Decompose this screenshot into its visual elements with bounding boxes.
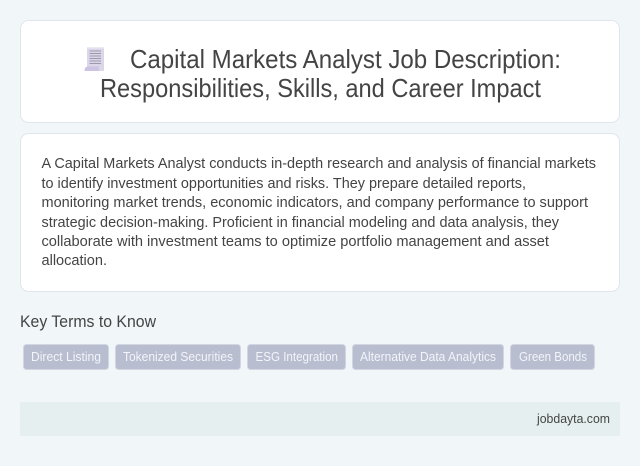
tag: esg integration [248,344,346,370]
description text: to identify investment opportunities and risks. They prepare detailed reports, [42,175,526,192]
tag: direct listing [24,344,108,370]
description text: collaborate with investment teams to optimize portfolio management and asset [42,233,550,250]
title: Responsibilities, Skills, and Career Impact [100,75,541,103]
panel: title card [20,20,620,122]
tag: alternative data analytics [352,344,504,370]
title: Capital Markets Analyst Job Description: [130,46,561,74]
tag: green bonds: Green Bonds [519,349,587,364]
tag: tokenized securities [116,344,240,370]
tag: direct listing: Direct Listing [31,349,101,364]
heading: key terms: Key Terms to Know [20,312,157,331]
description text: A Capital Markets Analyst conducts in-depth research and analysis of financial markets [42,155,596,172]
description text [42,155,596,269]
tag: alternative data analytics: Alternative Data Analytics [360,349,496,364]
tag: esg integration: ESG Integration [256,349,338,364]
description text: allocation. [42,252,107,269]
panel: description card [20,134,620,292]
footer bar [20,402,620,436]
description text: monitoring market trends, economic indicators, and company performance to support [42,194,589,211]
description text: strategic decision-making. Proficient in financial modeling and data analysis, they [42,214,559,231]
tag: green bonds [510,344,594,370]
footer text: jobdayta.com [536,411,610,426]
tag: tokenized securities: Tokenized Securities [123,349,233,364]
title [100,46,561,103]
icon: document scroll [84,47,104,71]
tag list [24,344,594,370]
